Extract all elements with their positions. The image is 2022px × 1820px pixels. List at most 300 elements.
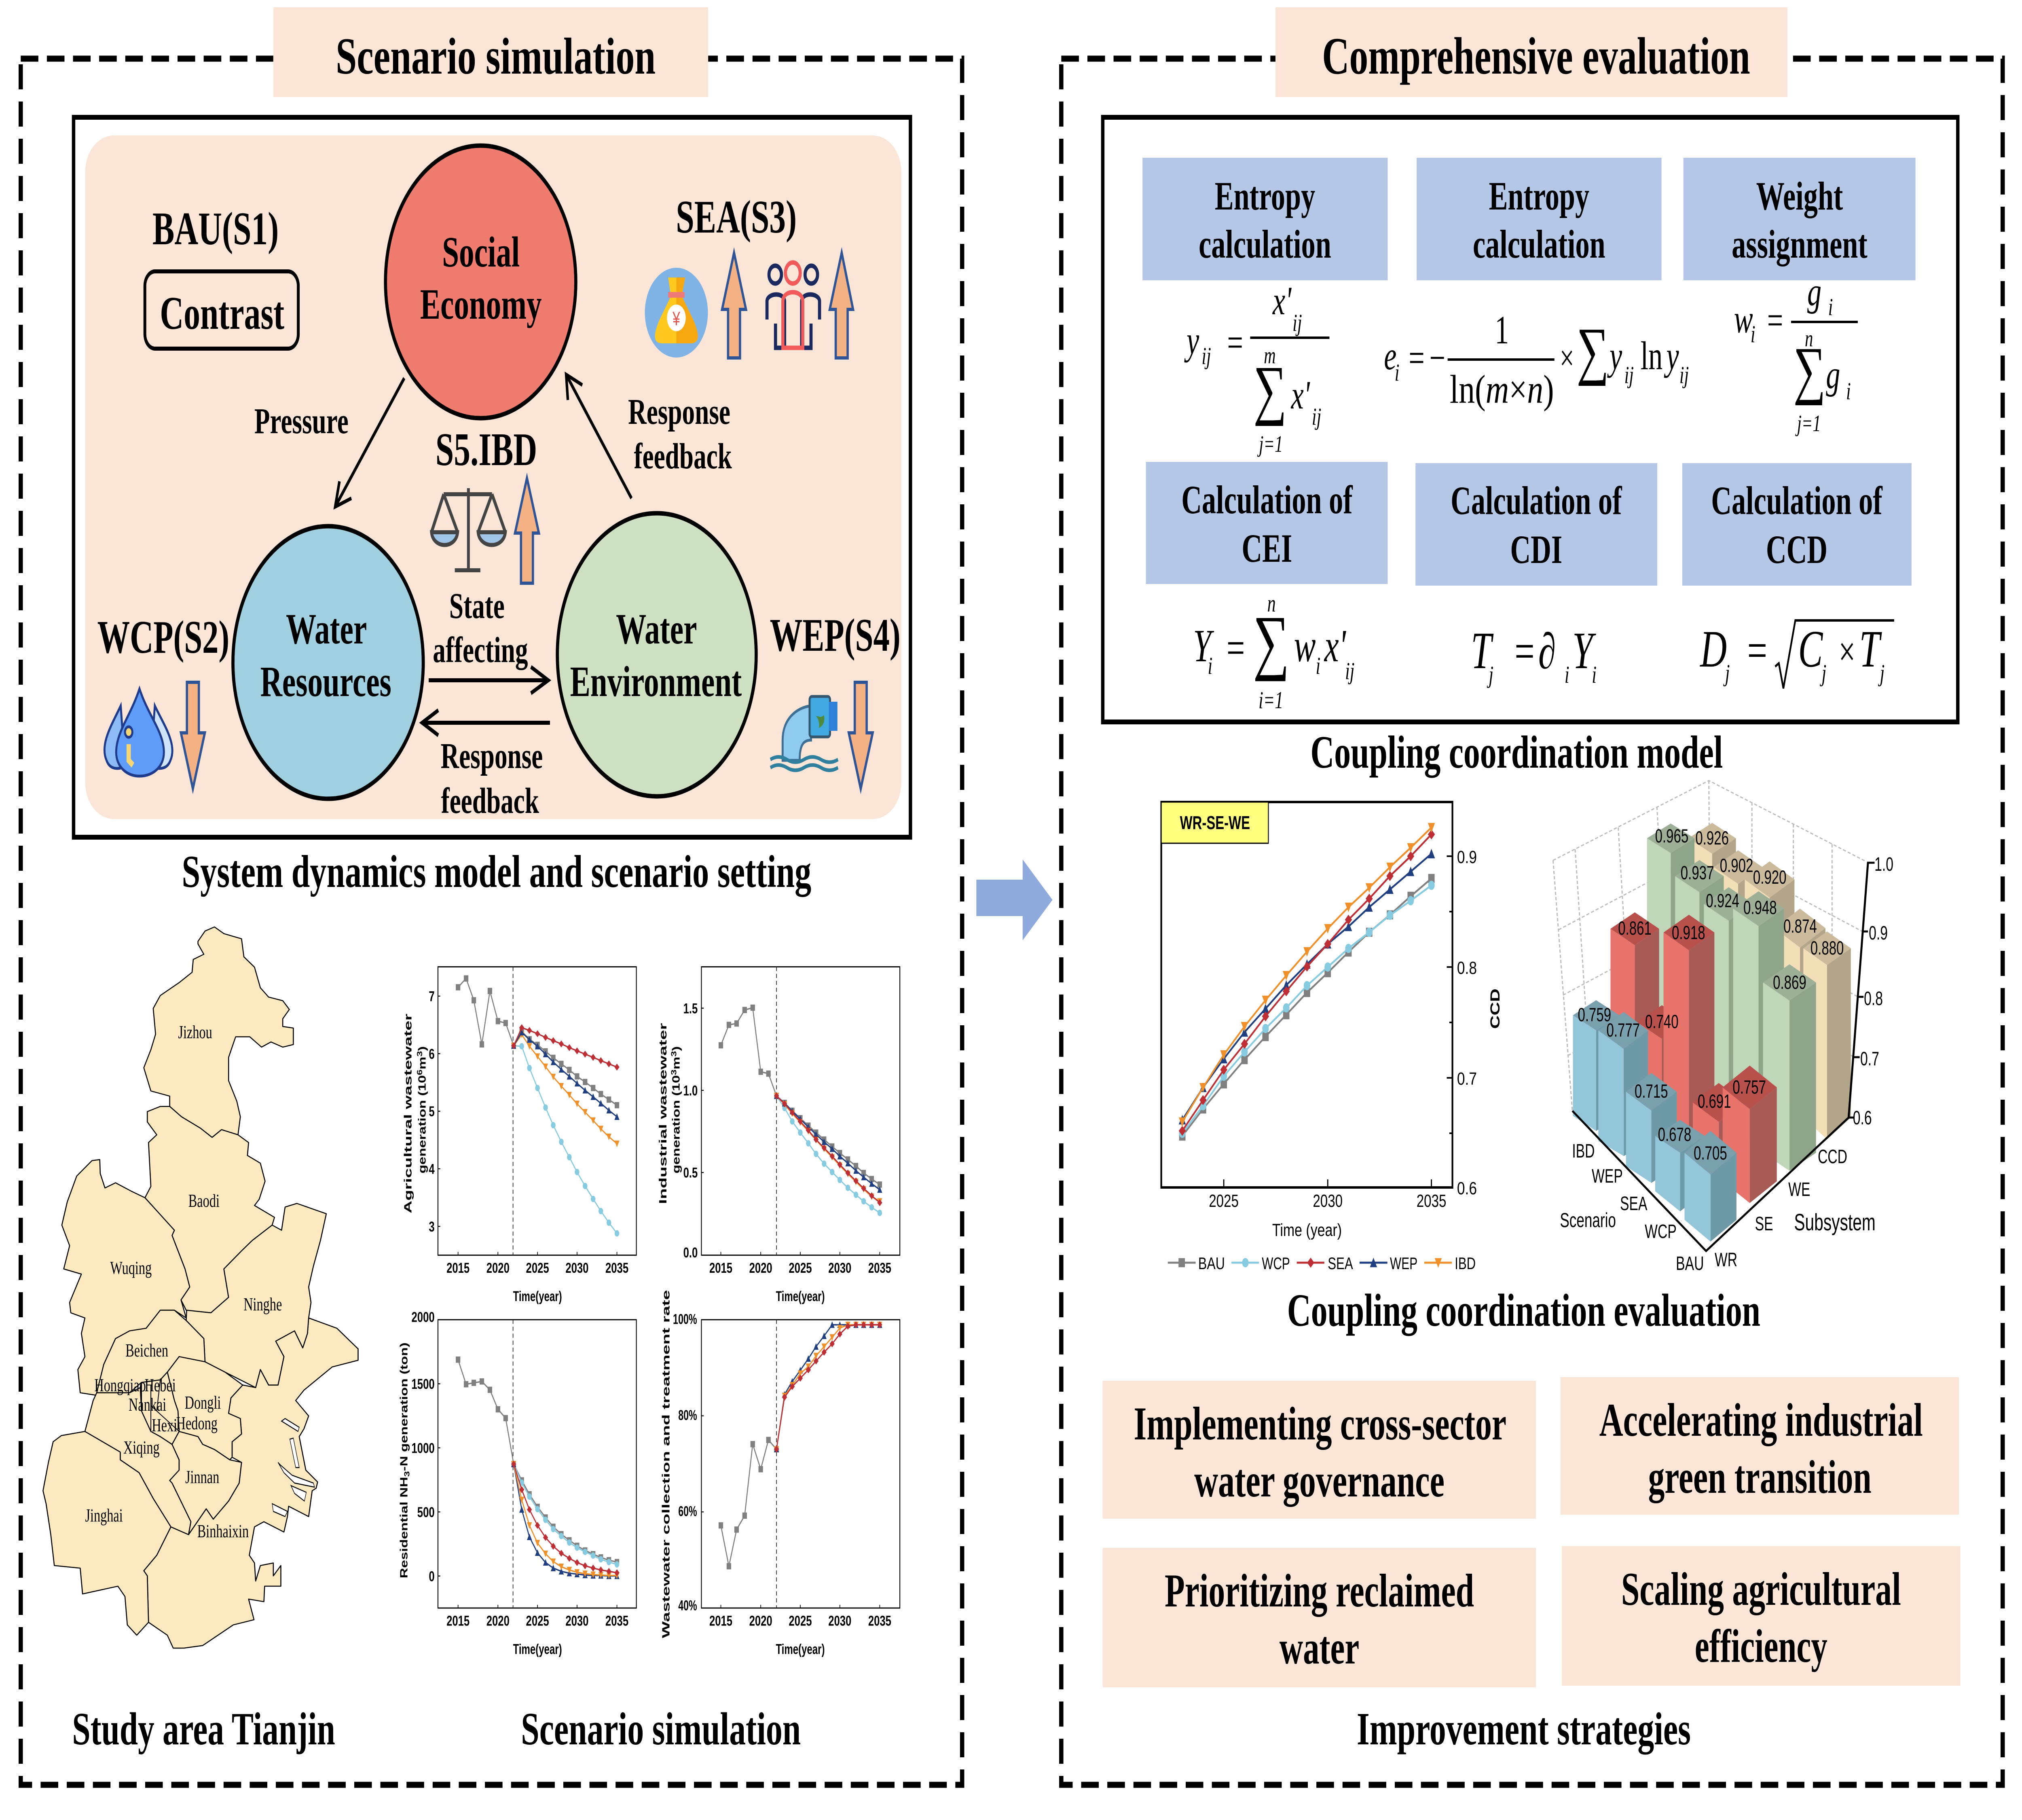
axis labels: SE (1755, 1213, 1773, 1234)
map district: Jinghai (43, 1431, 171, 1635)
chart: wastewater collection and treatment rate: 2030 (828, 1613, 851, 1629)
legend: SEA (1328, 1254, 1353, 1273)
formula: w_i: i (1846, 378, 1851, 405)
formula: e_i: e (1384, 333, 1396, 378)
value labels: 0.757 (1732, 1076, 1766, 1098)
axis labels (1560, 853, 1893, 1274)
box: calculation of CCD: CCD (1766, 527, 1827, 572)
formula: T_j (1471, 622, 1597, 688)
formula: e_i: ln(m×n) (1450, 367, 1554, 412)
map district: Xiqing (85, 1388, 191, 1534)
axis labels: 0.8 (1864, 987, 1883, 1009)
box: entropy calculation 1: Entropy (1215, 174, 1315, 218)
strategy: industrial green transition: Accelerating industrial (1599, 1394, 1923, 1446)
chart: residential NH3-N: 2035 (605, 1613, 628, 1629)
box: calculation of CEI: Calculation of (1181, 477, 1353, 522)
chart: industrial wastewater: 3 (670, 1069, 678, 1075)
chart: wastewater collection and treatment rate: 80% (678, 1407, 697, 1423)
circle: Water Resources: Resources (260, 658, 391, 705)
formula: e_i: i (1395, 360, 1399, 386)
formula: Y_i: i (1316, 653, 1320, 679)
value labels: 0.937 (1681, 862, 1714, 883)
heading: Coupling coordination model: Coupling coordination model (1310, 726, 1723, 778)
strategy: agricultural efficiency (1562, 1546, 1961, 1686)
bars: CCD subsystem (1688, 823, 1851, 1139)
chart: industrial wastewater: m (670, 1057, 682, 1069)
formula: D_j: × (1838, 628, 1855, 675)
formula: e_i: y (1607, 333, 1622, 378)
strategy: reclaimed water (1103, 1548, 1536, 1687)
map district: Jinnan (170, 1431, 241, 1534)
chart: agricultural wastewater: Time(year) (513, 1288, 562, 1304)
formula: Y_i (1193, 590, 1354, 714)
chart: agricultural wastewater: 2030 (565, 1260, 588, 1276)
chart: industrial wastewater: ) (670, 1046, 682, 1051)
formula: y_ij: m (1264, 342, 1276, 368)
axis labels: BAU (1676, 1252, 1704, 1274)
chart: WR-SE-WE CCD line chart: Time (year) (1272, 1221, 1342, 1240)
chart: 3D bar chart of CCD by scenario and subsystem (1553, 781, 1893, 1274)
map district: Dongli (167, 1357, 243, 1460)
value labels: 0.880 (1810, 937, 1844, 959)
chart: residential NH3-N (398, 1309, 637, 1657)
bars: SE subsystem (1610, 912, 1777, 1203)
axis labels: 0.9 (1869, 922, 1888, 944)
icon: up arrow balance (515, 478, 539, 583)
arrow: state affecting (429, 667, 548, 693)
chart: agricultural wastewater: 6 (429, 1046, 435, 1062)
formula: e_i: − (1430, 335, 1445, 380)
formula: e_i: × (1560, 338, 1574, 378)
chart: residential NH3-N: 1500 (412, 1376, 435, 1392)
box: calculation of CDI (1415, 463, 1657, 586)
formula: D_j: j (1878, 660, 1885, 687)
chart: residential NH3-N: -N generation (ton) (398, 1342, 410, 1471)
strategy: agricultural efficiency: Scaling agricultural (1621, 1563, 1901, 1615)
value labels: 0.715 (1635, 1080, 1668, 1102)
chart: wastewater collection and treatment rate: 100% (673, 1311, 697, 1327)
circle: Social Economy (385, 146, 576, 418)
box: Contrast: Contrast (160, 287, 284, 339)
formula: e_i: y (1664, 333, 1679, 378)
icon: money bag: ¥ (672, 307, 681, 329)
formula: T_j: = (1514, 624, 1535, 679)
map labels: Hexi (152, 1415, 177, 1435)
box: calculation of CCD (1682, 463, 1912, 586)
strategy: industrial green transition (1561, 1377, 1959, 1515)
value labels: 0.777 (1606, 1019, 1640, 1041)
chart walls (1553, 781, 1865, 1111)
chart: industrial wastewater: 1.0 (683, 1082, 698, 1099)
formula: T_j: ∂ (1538, 624, 1556, 679)
title: Comprehensive evaluation (1275, 7, 1787, 97)
formula: Y_i: i (1208, 653, 1212, 679)
formula: y_ij: j=1 (1257, 431, 1283, 457)
chart: industrial wastewater: 0.5 (683, 1165, 698, 1181)
formula: e_i: ij (1624, 362, 1634, 389)
box: calculation of CDI: Calculation of (1451, 478, 1622, 523)
chart: wastewater collection and treatment rate: Time(year) (776, 1641, 825, 1657)
formula: w_i: = (1767, 298, 1783, 343)
strategy: industrial green transition: green transition (1648, 1451, 1872, 1503)
chart: WR-SE-WE CCD line chart: 0.7 (1457, 1069, 1477, 1089)
axes (1572, 863, 1874, 1251)
icon: balance scale (431, 488, 506, 570)
chart: industrial wastewater: 2025 (789, 1260, 812, 1276)
formula: Y_i: Y (1193, 620, 1214, 671)
bars: WE subsystem (1647, 823, 1816, 1171)
axis labels: Scenario (1560, 1209, 1616, 1232)
chart: industrial wastewater: 2035 (868, 1260, 891, 1276)
chart: industrial wastewater: generation (10 (670, 1075, 682, 1173)
map: Tianjin districts (43, 927, 358, 1648)
axis labels: IBD (1572, 1140, 1595, 1162)
chart: residential NH3-N: 1000 (412, 1440, 435, 1456)
formula: e_i (1384, 307, 1689, 412)
chart: agricultural wastewater: 3 (429, 1219, 435, 1235)
label: State affecting: affecting (433, 630, 528, 670)
value labels: 0.948 (1743, 897, 1777, 918)
chart: industrial wastewater: 2015 (709, 1260, 732, 1276)
chart: wastewater collection and treatment rate: 2020 (749, 1613, 772, 1629)
circle: Water Environment (557, 513, 756, 796)
heading: Coupling coordination evaluation: Coupling coordination evaluation (1287, 1285, 1760, 1336)
chart: agricultural wastewater: generation (10 (416, 1075, 428, 1173)
map district: Wuqing (62, 1160, 190, 1395)
box: entropy calculation 2: Entropy (1489, 174, 1589, 218)
axis labels: 1.0 (1874, 853, 1893, 875)
chart: industrial wastewater: Industrial wastewater (657, 1023, 669, 1204)
map district: Binhai (144, 1318, 358, 1648)
value labels: 0.924 (1706, 890, 1739, 911)
icon: money bag (645, 268, 708, 358)
formula: D_j: C (1798, 620, 1823, 678)
value labels: 0.902 (1720, 855, 1753, 876)
box: calculation of CCD: Calculation of (1711, 478, 1883, 523)
map labels: Jinghai (85, 1505, 123, 1526)
map labels: Ninghe (243, 1294, 282, 1314)
map labels: Wuqing (110, 1257, 152, 1278)
title: Scenario simulation: Scenario simulation (336, 27, 656, 85)
formula: T_j: Y (1572, 622, 1596, 680)
formula: T_j: T (1471, 622, 1494, 680)
circle: Social Economy: Social (442, 228, 520, 276)
map labels: Jinnan (185, 1467, 219, 1487)
label box: WR-SE-WE (1161, 802, 1268, 843)
chart: wastewater collection and treatment rate (660, 1290, 900, 1657)
formula: D_j: = (1747, 623, 1767, 679)
formula: e_i: ∑ (1577, 315, 1609, 386)
chart: agricultural wastewater: m (416, 1057, 428, 1069)
chart: agricultural wastewater: ) (416, 1046, 428, 1051)
icon: down arrow environment (849, 682, 873, 789)
chart: industrial wastewater: 1.5 (683, 1000, 698, 1016)
axis labels: WE (1788, 1178, 1810, 1200)
box: calculation of CDI: CDI (1510, 527, 1562, 572)
chart: wastewater collection and treatment rate: 2015 (709, 1613, 732, 1629)
chart: residential NH3-N: Time(year) (513, 1641, 562, 1657)
heading: Study area Tianjin: Study area Tianjin (72, 1703, 335, 1754)
box: entropy calculation 1 (1142, 158, 1387, 280)
map labels (85, 1022, 282, 1541)
chart: WR-SE-WE CCD line chart: 2035 (1417, 1191, 1446, 1211)
bars: WR subsystem (1573, 1000, 1736, 1242)
chart: industrial wastewater: Time(year) (776, 1288, 825, 1304)
circle: Water Environment: Environment (570, 658, 742, 705)
icon: people (767, 262, 820, 348)
box: entropy calculation 2 (1417, 158, 1662, 280)
title: Comprehensive evaluation: Comprehensive evaluation (1322, 27, 1750, 85)
axis labels: SEA (1620, 1192, 1648, 1214)
map district: Baodi (145, 1107, 275, 1313)
chart: WR-SE-WE CCD line chart: 0.9 (1457, 848, 1477, 867)
chart: agricultural wastewater: 7 (429, 988, 435, 1004)
box: entropy calculation 2: calculation (1473, 222, 1605, 267)
formula: e_i: ln (1641, 333, 1662, 378)
legend: WEP (1390, 1254, 1417, 1273)
arrow: left to right flow (976, 859, 1053, 940)
axis labels: 0.7 (1860, 1048, 1879, 1069)
value labels: 0.918 (1672, 922, 1705, 943)
formula: y_ij: = (1227, 320, 1243, 365)
map labels: Xiqing (123, 1437, 160, 1458)
legend (1168, 1254, 1476, 1273)
formula: y_ij: x' (1290, 372, 1310, 417)
arrow: response to social economy (566, 375, 632, 498)
chart: wastewater collection and treatment rate: Wastewater collection and treatment rate (660, 1290, 672, 1638)
strategy: agricultural efficiency: efficiency (1695, 1620, 1827, 1672)
label: Response feedback bottom: feedback (441, 781, 539, 821)
chart: agricultural wastewater: 3 (415, 1051, 424, 1057)
heading: System dynamics model: System dynamics model and scenario setting (182, 847, 811, 897)
value labels: 0.705 (1694, 1142, 1727, 1164)
panel: system dynamics model (74, 117, 910, 837)
strategy: cross-sector water governance: water governance (1194, 1454, 1445, 1507)
panel: coupling coordination formulas (1103, 117, 1958, 722)
formula: Y_i: x' (1324, 620, 1346, 671)
formula: w_i: g (1826, 352, 1840, 397)
axis labels: WCP (1645, 1220, 1677, 1242)
formula: Y_i: n (1267, 590, 1276, 617)
formula: Y_i: w (1294, 620, 1316, 671)
value labels: 0.965 (1655, 825, 1688, 847)
value labels: 0.678 (1658, 1124, 1691, 1145)
value labels: 0.869 (1773, 971, 1806, 993)
strategy: cross-sector water governance (1103, 1381, 1536, 1519)
formula: y_ij: x' (1272, 278, 1292, 323)
map labels: Beichen (125, 1340, 168, 1361)
chart: residential NH3-N: 2015 (446, 1613, 470, 1629)
arrow: pressure (335, 378, 404, 507)
chart: WR-SE-WE CCD line chart: 0.8 (1457, 959, 1477, 978)
label: SEA(S3): SEA(S3) (676, 191, 797, 243)
formula: y_ij: ij (1292, 310, 1302, 336)
axis labels: WEP (1592, 1165, 1623, 1187)
chart: wastewater collection and treatment rate: 60% (678, 1503, 697, 1519)
formula: Y_i: ∑ (1253, 601, 1290, 681)
value labels: 0.691 (1698, 1090, 1731, 1112)
icon: water drops (104, 689, 172, 776)
axis labels: 0.6 (1853, 1107, 1872, 1128)
map labels: Baodi (188, 1190, 220, 1211)
label: S5.IBD: S5.IBD (436, 423, 537, 475)
chart: wastewater collection and treatment rate: 40% (678, 1598, 697, 1614)
chart: residential NH3-N: 2025 (526, 1613, 549, 1629)
formula: w_i: w (1734, 296, 1753, 341)
formula: e_i: = (1409, 335, 1425, 380)
value labels: 0.926 (1695, 827, 1729, 849)
formula: w_i: ∑ (1794, 334, 1826, 406)
axis labels: Subsystem (1794, 1209, 1876, 1236)
map labels: Hebei (145, 1375, 176, 1395)
label: WCP(S2): WCP(S2) (97, 611, 229, 663)
formula: D_j (1700, 620, 1894, 688)
value labels: 0.874 (1783, 915, 1817, 937)
formula: w_i (1734, 269, 1858, 436)
value labels (1578, 825, 1844, 1164)
right dashed frame (1061, 59, 2003, 1785)
label: Pressure: Pressure (254, 401, 349, 441)
heading: Scenario simulation lower: Scenario simulation (521, 1703, 801, 1754)
box: calculation of CEI (1146, 462, 1387, 584)
formula: e_i: ij (1679, 362, 1689, 389)
circle: Social Economy: Economy (420, 280, 542, 328)
chart: residential NH3-N: 500 (417, 1504, 435, 1520)
box: weight assignment: assignment (1732, 222, 1868, 267)
axis labels: CCD (1818, 1145, 1847, 1167)
value labels: 0.920 (1753, 866, 1787, 888)
formula: y_ij (1184, 278, 1329, 457)
formula: y_ij: y (1184, 318, 1199, 363)
map labels: Hongqiao (94, 1375, 146, 1395)
label: Response feedback bottom (440, 736, 543, 821)
strategy: cross-sector water governance: Implementing cross-sector (1134, 1397, 1506, 1450)
label: State affecting: State (449, 586, 505, 626)
formula: T_j: i (1565, 662, 1569, 688)
strategy: reclaimed water: water (1280, 1621, 1359, 1674)
map district: Ninghe (186, 1204, 326, 1388)
box: entropy calculation 1: calculation (1199, 222, 1331, 267)
arrow: response to water resources (422, 710, 550, 735)
charts: scenario simulation line charts (398, 967, 900, 1657)
chart: industrial wastewater: 2020 (749, 1260, 772, 1276)
box: weight assignment: Weight (1756, 174, 1843, 218)
formula: Y_i: = (1227, 622, 1245, 673)
label: State affecting (433, 586, 528, 670)
box: weight assignment (1684, 158, 1916, 280)
map district: Beichen (97, 1310, 205, 1393)
chart: WR-SE-WE CCD line chart: 2030 (1313, 1191, 1343, 1211)
formula: D_j: j (1820, 660, 1826, 687)
label: Response feedback right: Response (628, 392, 730, 432)
chart: industrial wastewater (657, 967, 900, 1304)
chart: residential NH3-N: 2000 (412, 1309, 435, 1325)
box: Contrast (145, 271, 298, 349)
formula: T_j: i (1592, 662, 1597, 688)
chart: wastewater collection and treatment rate: 2035 (868, 1613, 891, 1629)
formula: D_j: T (1859, 620, 1882, 678)
chart: agricultural wastewater (402, 967, 637, 1304)
formula: y_ij: ij (1312, 404, 1321, 430)
chart: agricultural wastewater: Agricultural wastewater (402, 1014, 414, 1213)
left dashed frame (21, 59, 962, 1785)
map: central districts (142, 1372, 179, 1444)
strategy: reclaimed water: Prioritizing reclaimed (1165, 1564, 1474, 1617)
box: calculation of CEI: CEI (1242, 526, 1292, 571)
formula: w_i: j=1 (1795, 410, 1821, 436)
icon: down arrow water (181, 682, 205, 789)
label box: WR-SE-WE: WR-SE-WE (1180, 813, 1250, 833)
label: BAU(S1): BAU(S1) (152, 203, 279, 254)
formula: w_i: i (1751, 321, 1756, 348)
chart: agricultural wastewater: 4 (429, 1161, 435, 1177)
chart: WR-SE-WE CCD line chart: CCD (1488, 988, 1503, 1029)
formula: D_j: j (1723, 660, 1730, 687)
circle: Water Resources (233, 526, 423, 799)
chart: industrial wastewater: 3 (670, 1051, 678, 1057)
formula: w_i: i (1828, 294, 1833, 321)
formula: w_i: g (1807, 269, 1821, 314)
label: WEP(S4): WEP(S4) (770, 609, 901, 661)
formula: D_j: D (1700, 620, 1727, 678)
legend: BAU (1198, 1254, 1225, 1273)
formula: w_i: n (1805, 325, 1813, 351)
map: port inlets (272, 1418, 315, 1517)
chart: agricultural wastewater: 2025 (526, 1260, 549, 1276)
formula: y_ij: ∑ (1253, 352, 1287, 426)
chart: residential NH3-N: Residential NH (398, 1477, 410, 1578)
chart: agricultural wastewater: 2035 (605, 1260, 628, 1276)
chart: wastewater collection and treatment rate: 2025 (789, 1613, 812, 1629)
chart: industrial wastewater: 0.0 (683, 1244, 698, 1261)
map labels: Hedong (176, 1413, 218, 1433)
label: Response feedback bottom: Response (440, 736, 543, 776)
chart: residential NH3-N: 2020 (486, 1613, 510, 1629)
chart: agricultural wastewater: 6 (415, 1069, 424, 1075)
value labels: 0.740 (1645, 1011, 1679, 1032)
circle: Water Resources: Water (286, 605, 367, 653)
legend: WCP (1262, 1254, 1290, 1273)
label: Response feedback right: feedback (634, 436, 732, 476)
chart: WR-SE-WE CCD line chart: 0.6 (1457, 1179, 1477, 1198)
chart: residential NH3-N: 2030 (565, 1613, 588, 1629)
chart: industrial wastewater: 2030 (828, 1260, 851, 1276)
axis labels: WR (1715, 1249, 1737, 1270)
chart: WR-SE-WE CCD line chart: 2025 (1209, 1191, 1239, 1211)
label: Response feedback right (628, 392, 732, 476)
chart: residential NH3-N: 3 (403, 1471, 411, 1477)
title: Scenario simulation (273, 7, 708, 97)
icon: discharge pipe (770, 696, 838, 770)
map labels: Jizhou (178, 1022, 212, 1042)
heading: Improvement strategies: Improvement strategies (1357, 1703, 1691, 1754)
chart: agricultural wastewater: 2020 (486, 1260, 510, 1276)
map labels: Nankai (129, 1394, 166, 1415)
map labels: Dongli (185, 1392, 221, 1413)
legend: IBD (1455, 1254, 1476, 1273)
circle: Water Environment: Water (616, 605, 697, 653)
formula: y_ij: ij (1201, 343, 1211, 370)
map district: Jizhou (144, 927, 293, 1137)
formula: e_i: 1 (1495, 307, 1509, 352)
formula: T_j: j (1487, 662, 1493, 688)
value labels: 0.759 (1578, 1004, 1611, 1025)
chart: residential NH3-N: 0 (429, 1568, 435, 1584)
value labels: 0.861 (1618, 917, 1652, 939)
map labels: Binhaixin (197, 1521, 249, 1541)
icon: up arrow economy (722, 253, 746, 358)
chart: WR-SE-WE CCD line chart (1161, 802, 1503, 1273)
